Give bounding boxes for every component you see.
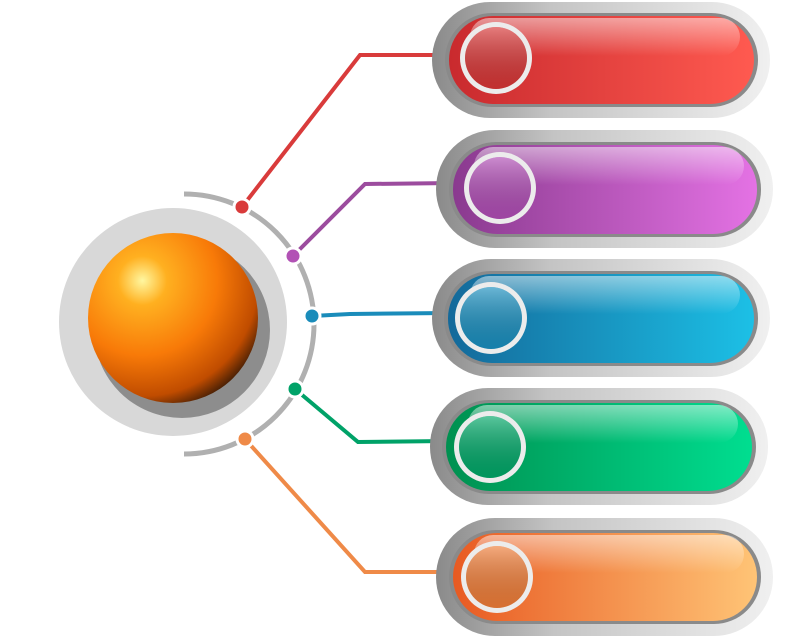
pill 3 blue <box>432 259 770 377</box>
connector lines <box>242 55 454 572</box>
gray arc <box>184 194 314 454</box>
connector dots <box>234 199 320 447</box>
pill 5 orange <box>436 518 773 636</box>
pill 1 red <box>432 2 770 118</box>
pill 4 green <box>430 388 768 505</box>
pill 2 purple <box>436 130 773 248</box>
center sphere <box>59 208 287 436</box>
